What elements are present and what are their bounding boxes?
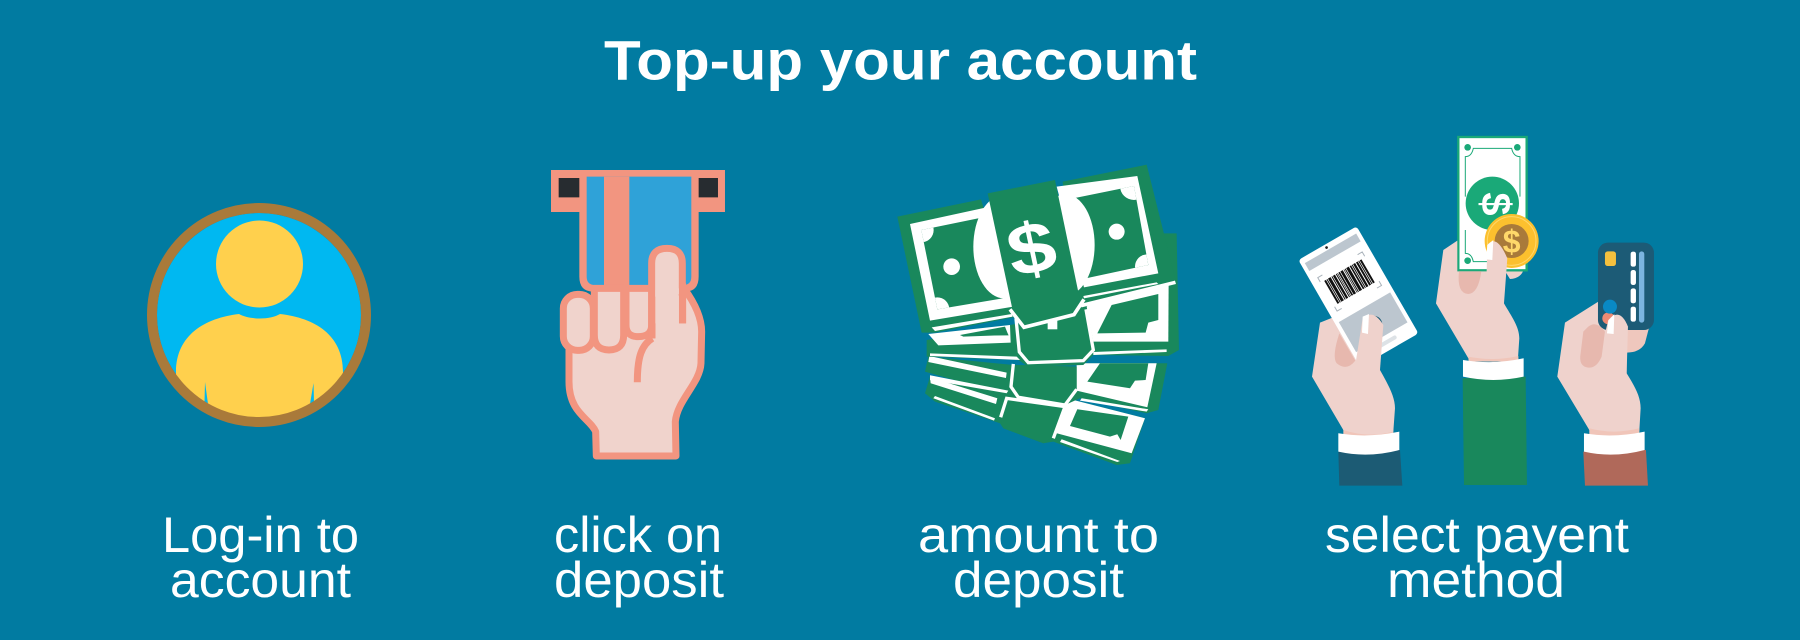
label: click on deposit: click on [554,507,722,563]
card slot [551,170,725,292]
phone [1298,226,1418,367]
hand with banknote and coin: $ [1472,192,1519,216]
third bundle [925,356,1167,413]
left sleeve [1338,450,1402,486]
card dashes [1631,252,1636,322]
icon: three hands with payment methods [1298,137,1654,486]
hand with phone and barcode [1298,226,1418,486]
label: log-in to account: account [170,552,351,608]
label: amount to deposit [918,507,1159,608]
right sleeve [1583,450,1648,486]
chip [1605,251,1616,266]
card dots [1602,312,1614,324]
label: amount to deposit: amount to [918,507,1159,563]
card [587,177,691,285]
card [1598,243,1654,330]
thumb [1600,315,1628,390]
thumbnail [1486,240,1493,260]
bottom bundle [925,377,1145,465]
second bundle [927,233,1179,367]
label: log-in to account: Log-in to [162,507,359,563]
center sleeve [1463,377,1527,485]
wrist [1589,428,1639,437]
slot screws [559,178,718,197]
hand with banknote and coin [1436,137,1539,485]
label: log-in to account [162,507,359,608]
hand with banknote and coin: $ [1503,224,1521,260]
label: click on deposit: deposit [554,552,724,608]
palm [1312,317,1395,435]
card stripe [1639,251,1644,323]
wrist [1343,428,1393,437]
shadow in palm [1580,324,1605,368]
thumb [1356,315,1383,393]
hand [563,248,702,456]
title: Top-up your account [604,28,1197,92]
coin [1485,214,1539,268]
label: select payent method: select payent [1325,507,1629,563]
label: click on deposit [554,507,724,608]
thumbnail [1362,314,1369,334]
shadow in palm [1335,333,1355,367]
left bill [897,199,1014,337]
banknote decoration [1465,148,1520,262]
label: select payent method: method [1387,552,1565,608]
cuff [1463,358,1524,380]
hand with bank card [1557,243,1654,486]
icon: stack of dollar bills [897,165,1179,465]
palm [1436,241,1519,362]
fingers behind note [1503,268,1524,279]
shadow in palm [1459,271,1481,294]
wrist [1468,356,1519,362]
label: amount to deposit: deposit [953,552,1124,608]
right bill [1056,164,1176,308]
fingers behind card [1627,327,1649,353]
icon: hand inserting card [551,170,725,456]
palm [1557,302,1641,435]
thumbnail [1607,314,1614,334]
left cuff [1338,432,1399,455]
center band with dollar sign [988,180,1084,327]
icon: user avatar [152,208,366,430]
cuff [1584,432,1645,455]
center band with dollar sign: $ [1000,204,1063,293]
banknote [1458,137,1527,270]
card stripe [604,177,629,287]
label: select payent method [1325,507,1629,608]
